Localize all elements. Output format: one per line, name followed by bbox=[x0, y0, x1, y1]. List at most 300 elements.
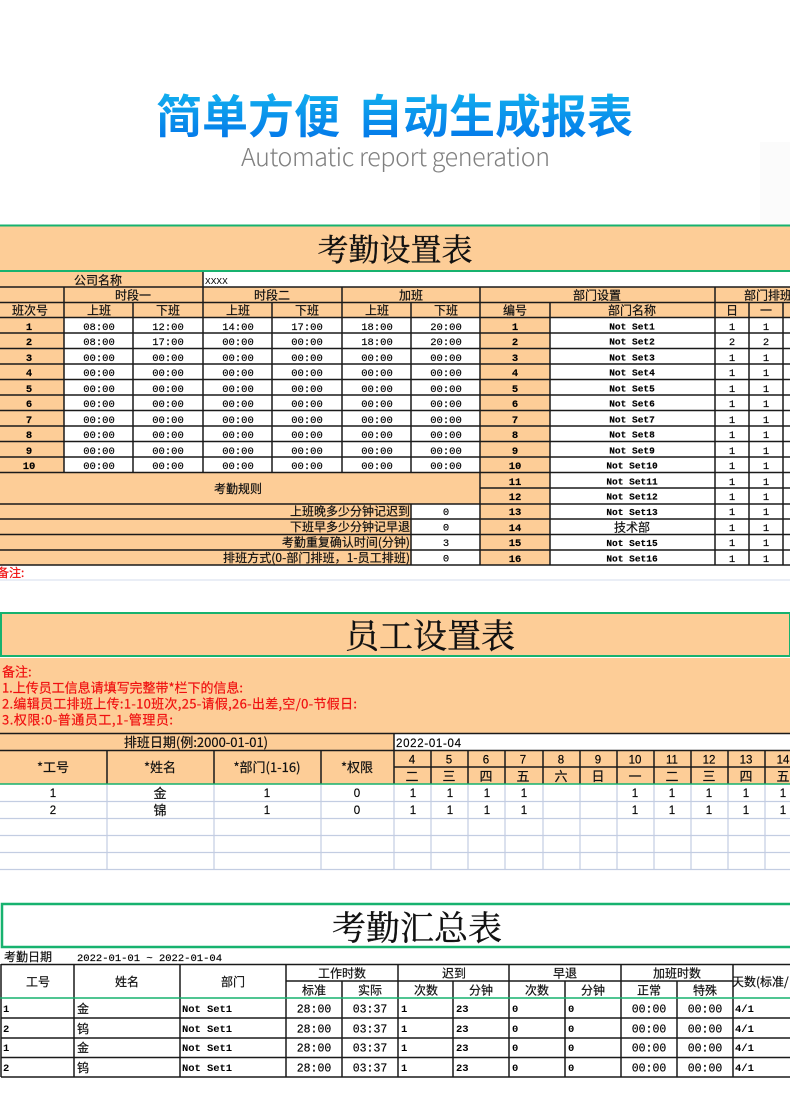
table header: 部门设置 bbox=[573, 286, 621, 304]
employee header text: 11 bbox=[666, 754, 678, 766]
employee rows: 金 bbox=[153, 783, 167, 802]
summary rows: 2 bbox=[3, 1063, 9, 1075]
shift rows: 4 bbox=[26, 368, 32, 380]
table header: 时段一 bbox=[115, 286, 151, 304]
department rows: 1 bbox=[729, 353, 735, 365]
shift rows: 20:00 bbox=[430, 337, 462, 349]
department rows: 1 bbox=[729, 492, 735, 504]
shift rows: 00:00 bbox=[222, 461, 254, 473]
summary rows: 23 bbox=[456, 1024, 469, 1036]
department rows: 1 bbox=[763, 446, 769, 458]
department rows: 1 bbox=[729, 399, 735, 411]
employee header text: 二 bbox=[665, 766, 679, 785]
employee rows: 1 bbox=[410, 805, 416, 817]
employee rows bbox=[50, 783, 786, 819]
employee header text: 三 bbox=[442, 766, 456, 785]
summary rows: 0 bbox=[512, 1024, 518, 1036]
summary rows: 0 bbox=[512, 1043, 518, 1055]
employee rows: 1 bbox=[743, 805, 749, 817]
table header: 班次号 bbox=[12, 302, 48, 318]
summary header text: 加班时数 bbox=[653, 964, 701, 982]
department rows: 1 bbox=[763, 492, 769, 504]
summary rows: 00:00 bbox=[688, 1024, 722, 1036]
employee rows: 2 bbox=[50, 805, 56, 817]
shift rows: 00:00 bbox=[152, 399, 184, 411]
department rows: 1 bbox=[763, 538, 769, 550]
employee rows: 1 bbox=[447, 788, 453, 800]
shift rows: 00:00 bbox=[222, 384, 254, 396]
panel: employee settings table bbox=[0, 613, 790, 870]
employee rows: 1 bbox=[743, 788, 749, 800]
department rows: 1 bbox=[729, 415, 735, 427]
attendance rules: 0 bbox=[443, 507, 449, 519]
shift rows: 00:00 bbox=[430, 353, 462, 365]
summary rows: 1 bbox=[3, 1043, 9, 1055]
shift rows: 00:00 bbox=[430, 461, 462, 473]
department rows: 7 bbox=[512, 415, 518, 427]
shift rows: 00:00 bbox=[222, 446, 254, 458]
employee rows: 1 bbox=[50, 788, 56, 800]
summary rows: 23 bbox=[456, 1063, 469, 1075]
attendance rules: 下班早多少分钟记早退 bbox=[290, 518, 410, 535]
employee rows: 1 bbox=[484, 805, 490, 817]
employee header text: 五 bbox=[516, 766, 530, 785]
department rows: 3 bbox=[512, 353, 518, 365]
summary rows: 钨 bbox=[77, 1059, 89, 1076]
table header bbox=[12, 286, 790, 318]
employee header text: 14 bbox=[777, 754, 790, 766]
department rows: Not Set13 bbox=[606, 507, 658, 518]
employee header text: 10 bbox=[629, 754, 641, 766]
shift rows: 18:00 bbox=[361, 322, 393, 334]
department rows: 11 bbox=[509, 477, 521, 489]
shift rows: 1 bbox=[26, 322, 32, 334]
summary header text: 标准 bbox=[302, 982, 326, 998]
employee header text: 二 bbox=[405, 766, 419, 785]
summary rows: 00:00 bbox=[632, 1062, 666, 1076]
employee rows: 1 bbox=[410, 788, 416, 800]
shift rows: 5 bbox=[26, 384, 32, 396]
banner: attendance settings: 考勤设置表 bbox=[318, 233, 472, 268]
department rows: 12 bbox=[509, 492, 521, 504]
banner: employee settings: 员工设置表 bbox=[345, 618, 515, 656]
shift rows: 00:00 bbox=[361, 368, 393, 380]
table header: 一 bbox=[760, 302, 772, 318]
summary grid bbox=[1, 964, 790, 1077]
employee header text: *工号 bbox=[37, 757, 69, 776]
company row: 公司名称 bbox=[74, 272, 122, 288]
department rows: 1 bbox=[763, 554, 769, 566]
shift rows: 00:00 bbox=[83, 384, 115, 396]
shift rows: 00:00 bbox=[83, 415, 115, 427]
banner: attendance summary bbox=[2, 904, 790, 948]
shift rows: 00:00 bbox=[361, 399, 393, 411]
shift rows: 00:00 bbox=[291, 384, 323, 396]
department rows: 16 bbox=[509, 554, 521, 566]
date range: 2022-01-01 ~ 2022-01-04 bbox=[77, 953, 222, 965]
table header: 日 bbox=[726, 302, 738, 318]
employee header text: 日 bbox=[591, 766, 605, 785]
department rows: 8 bbox=[512, 430, 518, 442]
header grid bbox=[0, 734, 790, 784]
attendance rules: 上班晚多少分钟记迟到 bbox=[290, 502, 410, 520]
banner: attendance summary: 考勤汇总表 bbox=[332, 910, 502, 948]
summary rows: 1 bbox=[3, 1004, 9, 1016]
department rows: 1 bbox=[729, 384, 735, 396]
department rows: Not Set3 bbox=[609, 352, 655, 364]
department rows: 1 bbox=[763, 399, 769, 411]
department rows: 15 bbox=[509, 538, 521, 550]
notes: 3.权限:0-普通员工,1-管理员: bbox=[2, 710, 173, 728]
summary rows: 00:00 bbox=[632, 1004, 666, 1016]
department rows: 1 bbox=[729, 477, 735, 489]
shift rows: 00:00 bbox=[152, 384, 184, 396]
department rows: 1 bbox=[763, 461, 769, 473]
employee header text: *权限 bbox=[341, 757, 373, 776]
summary header text: 分钟 bbox=[581, 982, 605, 998]
summary rows: 03:37 bbox=[353, 1042, 387, 1056]
department rows: 2 bbox=[512, 337, 518, 349]
summary rows: 00:00 bbox=[688, 1042, 722, 1056]
summary rows: 1 bbox=[401, 1043, 407, 1055]
department rows: 1 bbox=[763, 384, 769, 396]
shift rows: 10 bbox=[23, 461, 35, 473]
shift rows: 00:00 bbox=[222, 430, 254, 442]
table header: 上班 bbox=[87, 302, 111, 318]
shift rows: 00:00 bbox=[222, 337, 254, 349]
date range: 考勤日期 bbox=[4, 948, 52, 965]
shift rows: 17:00 bbox=[152, 337, 184, 349]
shift rows: 18:00 bbox=[361, 337, 393, 349]
shift rows: 8 bbox=[26, 430, 32, 442]
shift rows: 20:00 bbox=[430, 322, 462, 334]
summary header text: 正常 bbox=[637, 982, 661, 998]
title: 简单方便 bbox=[156, 81, 340, 147]
employee rows: 1 bbox=[669, 805, 675, 817]
shift rows: 00:00 bbox=[222, 353, 254, 365]
summary rows: 23 bbox=[456, 1004, 469, 1016]
employee header text: 12 bbox=[703, 754, 715, 766]
shift rows: 00:00 bbox=[83, 446, 115, 458]
notes: 2.编辑员工排班上传:1-10班次,25-请假,26-出差,空/0-节假日: bbox=[2, 694, 357, 712]
grid lines bbox=[0, 272, 790, 565]
department rows: 1 bbox=[763, 415, 769, 427]
summary header text: 分钟 bbox=[469, 982, 493, 998]
employee rows: 1 bbox=[780, 788, 786, 800]
employee header text: 四 bbox=[739, 766, 753, 785]
employee rows: 1 bbox=[780, 805, 786, 817]
table header: 编号 bbox=[503, 302, 527, 318]
summary header text: 早退 bbox=[553, 964, 577, 982]
table header background bbox=[0, 734, 394, 784]
summary rows: Not Set1 bbox=[182, 1043, 232, 1055]
shift rows: 00:00 bbox=[430, 399, 462, 411]
shift rows: 00:00 bbox=[152, 353, 184, 365]
summary rows: 0 bbox=[568, 1024, 574, 1036]
summary rows: 0 bbox=[568, 1063, 574, 1075]
notes: 1.上传员工信息请填写完整带*栏下的信息: bbox=[2, 678, 243, 696]
summary rows: 4/1 bbox=[735, 1004, 754, 1016]
summary rows: 03:37 bbox=[353, 1024, 387, 1036]
department rows: Not Set16 bbox=[606, 554, 658, 564]
summary rows: 28:00 bbox=[297, 1024, 331, 1036]
summary rows: 1 bbox=[401, 1063, 407, 1075]
summary rows: 28:00 bbox=[297, 1004, 331, 1016]
summary rows: 4/1 bbox=[735, 1063, 754, 1075]
department rows: Not Set10 bbox=[606, 460, 658, 472]
employee header text: 排班日期(例:2000-01-01) bbox=[124, 732, 268, 751]
summary rows bbox=[3, 1000, 754, 1076]
summary rows: 03:37 bbox=[353, 1004, 387, 1016]
employee rows: 0 bbox=[354, 805, 360, 817]
shift rows: 00:00 bbox=[83, 461, 115, 473]
employee rows: 1 bbox=[669, 788, 675, 800]
shift rows: 14:00 bbox=[222, 322, 254, 334]
shift rows: 00:00 bbox=[361, 430, 393, 442]
department rows: 1 bbox=[763, 322, 769, 334]
summary rows: 2 bbox=[3, 1024, 9, 1036]
summary rows: 0 bbox=[568, 1004, 574, 1016]
summary rows: 0 bbox=[568, 1043, 574, 1055]
summary rows: 金 bbox=[77, 1000, 89, 1017]
summary rows: Not Set1 bbox=[182, 1063, 232, 1075]
department rows: 5 bbox=[512, 384, 518, 396]
summary rows: 金 bbox=[77, 1039, 89, 1056]
attendance rules: 考勤规则 bbox=[214, 480, 262, 497]
employee header text: *姓名 bbox=[144, 757, 176, 776]
table header: 上班 bbox=[226, 302, 250, 318]
department rows: 4 bbox=[512, 368, 518, 380]
shift rows: 3 bbox=[26, 353, 32, 365]
summary header text: 特殊 bbox=[693, 982, 717, 998]
table header: 部门名称 bbox=[608, 302, 656, 318]
company row bbox=[74, 272, 228, 288]
shift rows: 7 bbox=[26, 415, 32, 427]
department rows: 1 bbox=[729, 446, 735, 458]
employee header text: *部门(1-16) bbox=[233, 757, 301, 776]
shift rows: 00:00 bbox=[430, 415, 462, 427]
shift rows: 00:00 bbox=[291, 368, 323, 380]
shift rows: 2 bbox=[26, 337, 32, 349]
notes: 备注: bbox=[2, 662, 32, 680]
attendance rules: 3 bbox=[443, 538, 449, 550]
department rows: 1 bbox=[729, 461, 735, 473]
department rows: 9 bbox=[512, 446, 518, 458]
summary rows: 1 bbox=[401, 1004, 407, 1016]
department rows: 6 bbox=[512, 399, 518, 411]
shift rows: 00:00 bbox=[222, 399, 254, 411]
summary rows: 03:37 bbox=[353, 1062, 387, 1076]
employee header text: 四 bbox=[479, 766, 493, 785]
employee rows: 锦 bbox=[153, 800, 167, 819]
title: 自动生成报表 bbox=[357, 81, 633, 147]
shift rows: 08:00 bbox=[83, 322, 115, 334]
summary header text: 工号 bbox=[26, 973, 50, 990]
employee rows: 1 bbox=[706, 805, 712, 817]
department rows: Not Set7 bbox=[609, 414, 655, 426]
department rows: Not Set1 bbox=[609, 322, 655, 332]
summary rows: 0 bbox=[512, 1063, 518, 1075]
shift rows: 00:00 bbox=[222, 415, 254, 427]
shift rows: 00:00 bbox=[430, 446, 462, 458]
shift rows: 00:00 bbox=[361, 461, 393, 473]
employee header text: 五 bbox=[776, 766, 790, 785]
shift rows: 00:00 bbox=[291, 461, 323, 473]
employee header text: 9 bbox=[595, 754, 601, 766]
employee header text: 三 bbox=[702, 766, 716, 785]
shift rows: 00:00 bbox=[291, 399, 323, 411]
summary header text: 次数 bbox=[414, 982, 438, 998]
summary rows: 28:00 bbox=[297, 1062, 331, 1076]
shift rows: 00:00 bbox=[83, 353, 115, 365]
shift rows: 00:00 bbox=[361, 415, 393, 427]
department rows: Not Set4 bbox=[609, 368, 655, 378]
shift rows: 00:00 bbox=[291, 415, 323, 427]
employee rows: 1 bbox=[706, 788, 712, 800]
department rows: 1 bbox=[729, 554, 735, 566]
department rows: 1 bbox=[729, 507, 735, 519]
summary rows: Not Set1 bbox=[182, 1024, 232, 1036]
summary header text: 工作时数 bbox=[318, 964, 366, 982]
summary rows: 00:00 bbox=[688, 1004, 722, 1016]
employee header text: 7 bbox=[520, 754, 526, 766]
employee rows: 1 bbox=[484, 788, 490, 800]
department rows: Not Set6 bbox=[609, 398, 655, 410]
employee rows: 1 bbox=[632, 788, 638, 800]
department rows: 1 bbox=[763, 523, 769, 535]
table header: 上班 bbox=[365, 302, 389, 318]
shift rows: 00:00 bbox=[222, 368, 254, 380]
employee header text: 2022-01-04 bbox=[396, 738, 462, 750]
shift rows: 00:00 bbox=[152, 415, 184, 427]
shift rows: 00:00 bbox=[152, 430, 184, 442]
attendance rules: 排班方式(0-部门排班，1-员工排班) bbox=[223, 549, 410, 566]
shift rows: 00:00 bbox=[361, 353, 393, 365]
summary rows: 1 bbox=[401, 1024, 407, 1036]
body grid bbox=[0, 785, 790, 870]
department rows: 1 bbox=[763, 353, 769, 365]
summary rows: 0 bbox=[512, 1004, 518, 1016]
shift rows: 00:00 bbox=[152, 461, 184, 473]
banner: employee settings bbox=[1, 613, 790, 656]
summary header text: 迟到 bbox=[442, 964, 466, 982]
summary header text: 天数(标准/ bbox=[732, 973, 789, 990]
shift rows: 00:00 bbox=[430, 384, 462, 396]
shift rows: 00:00 bbox=[430, 368, 462, 380]
shift rows: 00:00 bbox=[291, 353, 323, 365]
summary header text bbox=[26, 964, 789, 998]
department rows: Not Set11 bbox=[606, 476, 658, 488]
employee header text: 13 bbox=[740, 754, 752, 766]
table header: 下班 bbox=[434, 302, 458, 318]
summary rows: 00:00 bbox=[688, 1062, 722, 1076]
attendance rules: 考勤重复确认时间(分钟) bbox=[282, 534, 410, 550]
employee rows: 1 bbox=[521, 805, 527, 817]
shift rows: 00:00 bbox=[83, 399, 115, 411]
department rows: 1 bbox=[729, 430, 735, 442]
panel: attendance settings table bbox=[0, 226, 790, 581]
table header: 下班 bbox=[156, 302, 180, 318]
employee rows: 1 bbox=[447, 805, 453, 817]
department rows: 13 bbox=[509, 507, 521, 519]
shift rows: 00:00 bbox=[291, 430, 323, 442]
employee rows: 1 bbox=[632, 805, 638, 817]
shift rows: 00:00 bbox=[291, 337, 323, 349]
shift rows: 00:00 bbox=[291, 446, 323, 458]
department rows: 1 bbox=[729, 322, 735, 334]
table header: 加班 bbox=[399, 286, 423, 304]
department rows: 2 bbox=[729, 337, 735, 349]
shift rows: 00:00 bbox=[83, 368, 115, 380]
summary rows: 4/1 bbox=[735, 1043, 754, 1055]
department rows: 1 bbox=[729, 368, 735, 380]
attendance rules: 0 bbox=[443, 522, 449, 534]
department rows: Not Set8 bbox=[609, 430, 655, 440]
summary header text: 部门 bbox=[221, 973, 245, 990]
department rows: 1 bbox=[763, 507, 769, 519]
banner: attendance settings bbox=[0, 226, 790, 271]
shift rows: 00:00 bbox=[83, 430, 115, 442]
shift rows bbox=[23, 322, 462, 473]
shift rows: 00:00 bbox=[152, 368, 184, 380]
shift rows: 00:00 bbox=[361, 446, 393, 458]
summary rows: 4/1 bbox=[735, 1024, 754, 1036]
department rows: 1 bbox=[763, 430, 769, 442]
attendance rules bbox=[214, 480, 449, 566]
company row: XXXX bbox=[205, 276, 228, 287]
summary rows: 00:00 bbox=[632, 1042, 666, 1056]
department rows: Not Set15 bbox=[606, 538, 658, 549]
employee rows: 1 bbox=[521, 788, 527, 800]
department rows: Not Set5 bbox=[609, 384, 655, 394]
department rows: 技术部 bbox=[614, 518, 650, 536]
heading bbox=[156, 81, 633, 174]
department rows: Not Set12 bbox=[606, 492, 658, 502]
notes bbox=[0, 658, 790, 733]
employee header text bbox=[37, 732, 790, 785]
employee rows: 1 bbox=[264, 788, 270, 800]
department rows: 1 bbox=[729, 523, 735, 535]
employee header text: 4 bbox=[409, 754, 416, 766]
summary rows: 28:00 bbox=[297, 1042, 331, 1056]
shift rows: 17:00 bbox=[291, 322, 323, 334]
attendance rules: 0 bbox=[443, 554, 449, 566]
employee header text: 六 bbox=[554, 766, 568, 785]
shift rows: 00:00 bbox=[361, 384, 393, 396]
department rows: 14 bbox=[509, 523, 521, 535]
department rows bbox=[509, 322, 769, 566]
employee header text: 5 bbox=[446, 754, 452, 766]
shift rows: 9 bbox=[26, 446, 32, 458]
employee header text: 6 bbox=[483, 754, 489, 766]
shift rows: 08:00 bbox=[83, 337, 115, 349]
shift rows: 00:00 bbox=[430, 430, 462, 442]
subtitle: Automatic report generation bbox=[241, 138, 550, 174]
department rows: 2 bbox=[763, 337, 769, 349]
employee rows: 1 bbox=[264, 805, 270, 817]
department rows: Not Set2 bbox=[609, 336, 655, 348]
shift rows: 6 bbox=[26, 399, 32, 411]
date range bbox=[4, 948, 222, 965]
employee rows: 0 bbox=[354, 788, 360, 800]
employee header text: 8 bbox=[558, 754, 564, 766]
table header: 下班 bbox=[295, 302, 319, 318]
shift rows: 00:00 bbox=[152, 446, 184, 458]
department rows: 1 bbox=[729, 538, 735, 550]
panel: attendance summary table bbox=[0, 904, 790, 1077]
summary rows: 23 bbox=[456, 1043, 469, 1055]
employee header text: 一 bbox=[628, 766, 642, 785]
